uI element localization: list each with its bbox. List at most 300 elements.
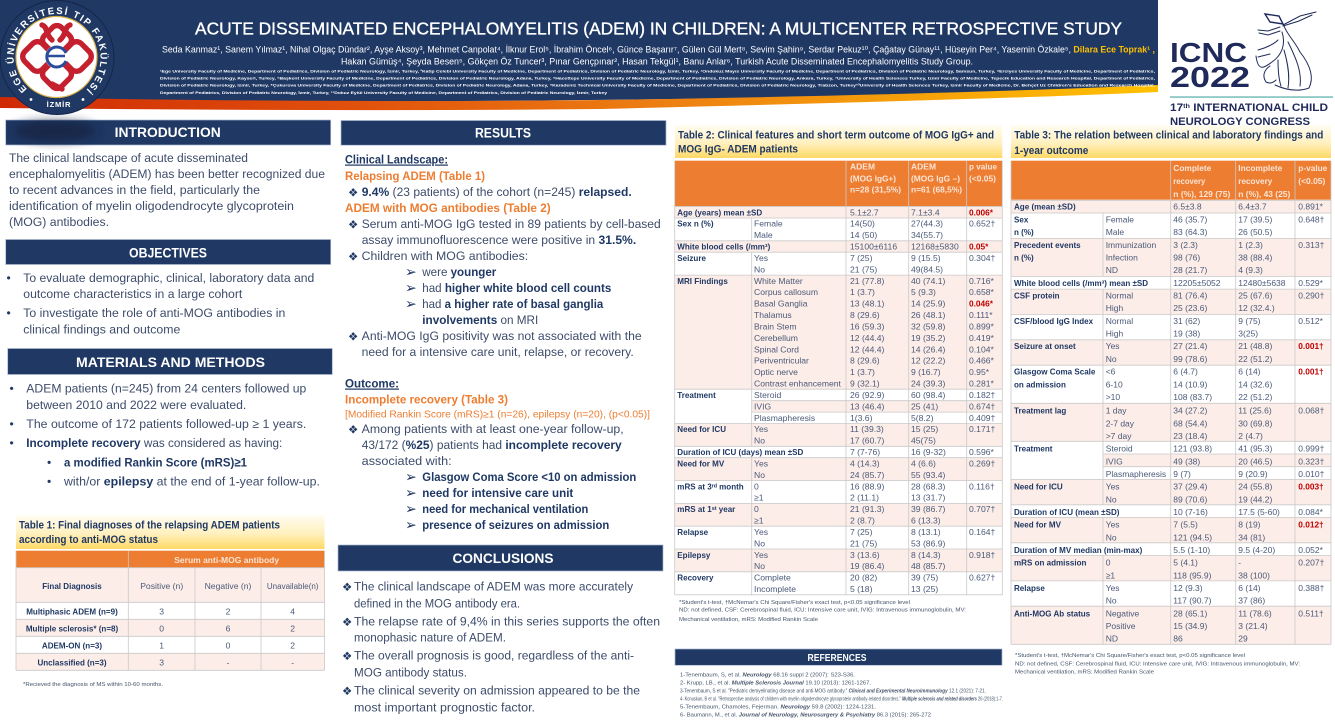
table 2 rows: Epilepsy: [677, 551, 711, 560]
logo: ICNC 2022: 2022: [1170, 62, 1250, 94]
table 2 rows: 8 (13.1): [911, 527, 941, 537]
table 2 rows: Corpus callosum: [754, 287, 818, 297]
text block: conclusions: ❖: [342, 684, 352, 698]
table 2 rows: mRS at 3ʳᵈ month: [677, 482, 744, 491]
text block: clinical landscape: ❖: [348, 250, 358, 264]
table 2 rows: 0.281*: [969, 378, 995, 388]
text block: introduction: (MOG) antibodies.: [9, 215, 109, 229]
header banner: [0, 0, 1158, 110]
table 3 header: n (%), 129 (75): [1173, 189, 1230, 199]
table 2 rows: White Matter: [754, 276, 803, 286]
table 3 rows: No: [1106, 596, 1117, 606]
table 3 rows: No: [1106, 532, 1117, 542]
table 3 footnotes: Mechanical ventilation, mRS: Modified Rankin Scale: [1015, 670, 1154, 676]
text block: conclusions: ❖: [342, 580, 352, 594]
table 1 grid: 2: [290, 640, 295, 650]
table 3 rows: 14 (32.6): [1238, 379, 1272, 389]
table 3 rows: 34 (27.2): [1173, 406, 1207, 416]
table 2 rows: Need for ICU: [677, 425, 726, 434]
table 3 rows: 0.001†: [1298, 367, 1324, 377]
table 2 rows: Steroid: [754, 390, 781, 400]
table 2 rows: ≥1: [754, 493, 764, 503]
text block: clinical landscape: were younger: [421, 265, 497, 279]
text block: conclusions: The relapse rate of 9,4% in this series supports the often: [354, 614, 660, 628]
table 3 rows: 0.511†: [1298, 608, 1324, 618]
logo: ICNC 2022: NEUROLOGY CONGRESS: [1170, 116, 1310, 128]
table 2 rows: Yes: [754, 527, 768, 537]
text block: clinical landscape: Serum anti-MOG IgG tested in 89 patients by cell-based: [362, 217, 661, 231]
table 3 rows: 14 (10.9): [1173, 379, 1207, 389]
text block: clinical landscape: ❖: [348, 186, 358, 200]
table 3 rows: 28 (65.1): [1173, 608, 1207, 618]
table 3 rows: 0.001†: [1298, 341, 1324, 351]
table 3 rows: 29: [1238, 634, 1248, 644]
table 2 rows: 9 (15.5): [911, 253, 941, 263]
heading: table 3 title: [1011, 125, 1331, 158]
table 3 rows: 26 (50.5): [1238, 227, 1272, 237]
table 1 grid: 2: [290, 623, 295, 633]
table 1 grid: 4: [290, 607, 295, 617]
affiliations: Department of Pediatrics, Division of Pediatric Neurology, İzmir, Turkey, ¹¹Dokuz Eylül University Faculty of Medicine, Department of Pediatrics, Division of Pediatric Neurology, İzmir, Turkey: [160, 90, 608, 95]
text block: objectives: outcome characteristics in a large cohort: [23, 287, 243, 301]
table 3 rows: [1014, 202, 1325, 644]
table 2 rows: 40 (74.1): [911, 276, 946, 286]
text block: objectives: •: [6, 271, 11, 285]
table 3 rows: 17 (39.5): [1238, 214, 1272, 224]
text block: methods: a modified Rankin Score (mRS)≥1: [64, 456, 247, 470]
table 2 rows: 39 (75): [911, 573, 938, 583]
text block: outcome: ❖: [348, 422, 358, 436]
text block: methods: •: [10, 417, 14, 431]
table 2 rows: Plasmapheresis: [754, 413, 815, 423]
table 3 rows: 46 (35.7): [1173, 214, 1207, 224]
table 2 rows: 13 (25): [911, 584, 938, 594]
table 2 rows: 15100±6116: [850, 242, 897, 252]
table 2 rows: 2 (8.7): [850, 516, 875, 526]
table 3 rows: Immunization: [1106, 240, 1157, 250]
panel: table 3: [1011, 125, 1331, 676]
table 2 rows: 55 (93.4): [911, 470, 946, 480]
table 1 grid: -: [227, 657, 230, 667]
table 3 rows: 3 (21.4): [1238, 621, 1268, 631]
text block: references: 3-Tenembaum, S et al. "Pediatric demyelinating disease and anti-MOG antibody." Clinical and Experimental Neuroimmunology 12.1 (2021): 7-21.: [680, 689, 986, 695]
table 3 header: Complete: [1173, 163, 1212, 173]
table 2 rows: 0.95*: [969, 367, 990, 377]
table 3 rows: 20 (46.5): [1238, 456, 1272, 466]
table 2 rows: 0.006*: [969, 207, 994, 217]
table 3 rows: 15 (34.9): [1173, 621, 1207, 631]
table 2 rows: 0: [754, 504, 759, 514]
table 2 rows: 0.716*: [969, 276, 995, 286]
affiliations: [160, 68, 1155, 95]
table 2 rows: 21 (91.3): [850, 504, 885, 514]
table 2 rows: Duration of ICU (days) mean ±SD: [677, 448, 804, 457]
table 3 rows: Male: [1106, 227, 1124, 237]
table 2 rows: Treatment: [677, 391, 716, 400]
table 3 rows: n (%): [1014, 253, 1034, 262]
table 3 rows: 81 (76.4): [1173, 290, 1207, 300]
table 2 rows: 49(84.5): [911, 264, 943, 274]
table 2 rows: 32 (59.8): [911, 321, 946, 331]
table 3 header: recovery: [1238, 176, 1273, 186]
table 2 rows: No: [754, 538, 765, 548]
heading: introduction: [6, 120, 331, 145]
table 3 rows: 0.891*: [1298, 202, 1324, 212]
table 2 rows: Complete: [754, 573, 791, 583]
table 2 rows: Cerebellum: [754, 333, 798, 343]
table 2 rows: 12168±5830: [911, 242, 959, 252]
text block: clinical landscape: ➢: [405, 264, 417, 280]
table 2 rows: 39 (86.7): [911, 504, 946, 514]
table 3 rows: 6 (14): [1238, 367, 1261, 377]
table 2 rows: [677, 207, 996, 594]
table 2 rows: 0.304†: [969, 253, 996, 263]
text block: introduction: The clinical landscape of acute disseminated: [9, 151, 248, 165]
table 3 rows: 0.529*: [1298, 278, 1324, 288]
text block: conclusions: The overall prognosis is good, regardless of the anti-: [354, 648, 634, 662]
table 1 grid: Final Diagnosis: [42, 582, 102, 591]
table 3 rows: Need for ICU: [1014, 483, 1063, 492]
table 2 rows: 0.674†: [969, 401, 996, 411]
table 1 grid: Positive (n): [140, 581, 183, 591]
table 3 rows: Glasgow Coma Scale: [1014, 368, 1096, 377]
text block: conclusions: monophasic nature of ADEM.: [354, 630, 506, 644]
table 3 rows: 28 (21.7): [1173, 265, 1207, 275]
heading: materials and methods: MATERIALS AND METHODS: [76, 354, 265, 370]
table 2 rows: Optic nerve: [754, 367, 798, 377]
table 3 rows: 0.648†: [1298, 214, 1325, 224]
table 2 rows: Contrast enhancement: [754, 378, 842, 388]
text block: outcome: Outcome:: [345, 376, 399, 390]
affiliations: Division of Pediatric Neurology, Izmir, Turkey, ⁸Çukurova University Faculty of Medicine, Department of Pediatrics, Division of Pediatric Neurology, Adana, Turkey, ⁹Karadeniz Technical University Faculty of Medicine, Department of Pediatrics, Division of Pediatric Neurology, Trabzon, Turkey¹⁰University of Health Sciences Turkey, Izmir Faculty of Medicine, Dr. Behçet Uz Children's Education and Research Hospital,: [160, 83, 1155, 88]
table 2 rows: 0.171†: [969, 424, 996, 434]
table 3 rows: 6 (4.7): [1173, 367, 1198, 377]
table 2 rows: 14 (50): [850, 230, 877, 240]
table 3 rows: 98 (76): [1173, 252, 1200, 262]
table 2 rows: 14 (25.9): [911, 299, 946, 309]
table 2 rows: 60 (98.4): [911, 390, 946, 400]
table 3 rows: ≥1: [1106, 570, 1115, 580]
table 1 grid: -: [291, 657, 294, 667]
text block: outcome: ➢: [405, 470, 417, 486]
text block: outcome: 43/172 (%25) patients had incomplete recovery: [362, 438, 622, 452]
table 3 rows: 31 (62): [1173, 316, 1200, 326]
table 3 rows: 12480±5638: [1238, 278, 1286, 288]
text block: clinical landscape: ➢: [405, 280, 417, 296]
table 3 header: recovery: [1173, 176, 1206, 186]
table 2 rows: MRI Findings: [677, 277, 728, 286]
table 1 grid: [16, 551, 324, 670]
text block: objectives: clinical findings and outcome: [23, 322, 181, 336]
text block: references: 5-Tenembaum, Chamoles, Fejerman. Neurology 59.8 (2002): 1224-1231.: [680, 705, 876, 711]
text block: methods: •: [10, 436, 14, 450]
table 3 rows: CSF protein: [1014, 292, 1060, 300]
table 2 rows: Female: [754, 219, 783, 229]
table 3 rows: 9 (75): [1238, 316, 1261, 326]
table 3 rows: 27 (21.4): [1173, 341, 1207, 351]
table 3 rows: 0.512*: [1298, 316, 1324, 326]
table 1 grid: 1: [159, 640, 164, 650]
table 2 grid: [675, 161, 1002, 595]
table 2 rows: 0.596*: [969, 447, 995, 457]
table 3 rows: 0.010†: [1298, 469, 1325, 479]
table 3 rows: High: [1106, 328, 1123, 338]
text block: references: 6- Baumann, M., et al. Journal of Neurology, Neurosurgery & Psychiatry 86.3 (2015): 265-272: [680, 713, 931, 719]
table 2 rows: Yes: [754, 458, 768, 468]
text block: outcome: need for mechanical ventilation: [422, 502, 588, 516]
table 2 rows: 13 (31.7): [911, 493, 946, 503]
table 2 rows: 19 (35.2): [911, 333, 946, 343]
table 2 rows: Age (years) mean ±SD: [677, 208, 762, 217]
table 2 rows: 27(44.3): [911, 219, 943, 229]
table 3 rows: White blood cells (/mm³) mean ±SD: [1014, 279, 1148, 288]
table 3 rows: 83 (64.3): [1173, 227, 1207, 237]
table 2 header: n=61 (68,5%): [911, 185, 962, 195]
table 3 rows: Steroid: [1106, 444, 1133, 454]
text block: outcome: ➢: [405, 502, 417, 518]
table 3 rows: Sex: [1014, 215, 1029, 224]
table 3 rows: 38 (100): [1238, 570, 1270, 580]
icon: Ege University Medical Faculty seal: İZMİR: [47, 100, 71, 109]
table 3 rows: Negative: [1106, 608, 1140, 618]
table 2 rows: 0.419*: [969, 333, 995, 343]
table 3 rows: 3(25): [1238, 328, 1258, 338]
table 3 rows: High: [1106, 303, 1123, 313]
heading: table 1 title: Table 1: Final diagnoses of the relapsing ADEM patients: [19, 520, 280, 532]
text block: methods: Incomplete recovery was considered as having:: [26, 436, 282, 450]
table 2 rows: 0.182†: [969, 390, 996, 400]
table 2 rows: 4 (14.3): [850, 458, 880, 468]
table 2 rows: 12 (44.4): [850, 344, 885, 354]
text block: introduction: to recent advances in the field, particularly the: [9, 183, 260, 197]
text block: clinical landscape: need for a intensive care unit, relapse, or recovery.: [362, 345, 634, 359]
table 2 footnotes: Mechanical ventilation, mRS: Modified Rankin Scale: [679, 617, 818, 623]
table 3 rows: on admission: [1014, 380, 1066, 389]
table 3 rows: Normal: [1106, 316, 1133, 326]
table 3 rows: 34 (81): [1238, 532, 1265, 542]
table 3 rows: 0.999†: [1298, 444, 1325, 454]
table 2 rows: 20 (82): [850, 573, 877, 583]
table 3 header: n (%), 43 (25): [1238, 189, 1290, 199]
table 3 rows: 22 (51.2): [1238, 354, 1272, 364]
text block: references: [680, 673, 1003, 719]
table 2 rows: 53 (86.9): [911, 538, 946, 548]
text block: outcome: [Modified Rankin Score (mRS)≥1 (n=26), epilepsy (n=20), (p<0.05)]: [345, 410, 650, 420]
authors: Seda Kanmaz¹, Sanem Yılmaz¹, Nihal Olgaç Dündar², Ayşe Aksoy³, Mehmet Canpolat⁴, İlknur Erol⁵, İbrahim Öncel⁶, Günce Başarır⁷, Gülen Gül Mert⁸, Sevim Şahin⁹, Serdar Pekuz¹⁰, Çağatay Günay¹¹, Hüseyin Per⁴, Yasemin Özkale⁵, Dilara Ece Toprak¹ ,: [162, 44, 1155, 54]
table 3 rows: 17.5 (5-60): [1238, 507, 1280, 517]
table 2 rows: 9 (32.1): [850, 378, 880, 388]
table 3 rows: 0.084*: [1298, 507, 1324, 517]
table 3 header: [1173, 163, 1328, 199]
text block: clinical landscape: ADEM with MOG antibodies (Table 2): [345, 201, 551, 215]
text block: outcome: associated with:: [362, 454, 452, 468]
table 3 rows: 12205±5052: [1173, 278, 1221, 288]
table 3 rows: Duration of MV median (min-max): [1014, 546, 1143, 555]
table 2 footnotes: ND: not defined, CSF: Cerebrospinal fluid, ICU: Intensive care unit, IVIG: Intravenous immunoglobulin, MV:: [679, 608, 966, 614]
text block: clinical landscape: ❖: [348, 330, 358, 344]
table 2 rows: Spinal Cord: [754, 344, 799, 354]
table 2 rows: 5 (18): [850, 584, 873, 594]
table 3 rows: Infection: [1106, 252, 1138, 262]
table 3 rows: 37 (86): [1238, 596, 1265, 606]
table 3 rows: 0.068†: [1298, 406, 1325, 416]
table 2 rows: 1(3.6): [850, 413, 873, 423]
table 3 rows: 0.003†: [1298, 482, 1324, 492]
table 2 rows: Yes: [754, 253, 768, 263]
table 1 grid: Serum anti-MOG antibody: [174, 555, 279, 565]
table 3 rows: Anti-MOG Ab status: [1014, 609, 1091, 618]
panel: references: [675, 649, 1003, 719]
heading: table 2 title: Table 2: Clinical features and short term outcome of MOG IgG+ and: [678, 129, 994, 141]
table 3 rows: 6 (14): [1238, 583, 1261, 593]
table 3 rows: Duration of ICU (mean ±SD): [1014, 508, 1120, 517]
table 2 rows: 34(55.7): [911, 230, 943, 240]
table 2 rows: White blood cells (/mm³): [677, 242, 771, 252]
table 2 rows: 26 (48.1): [911, 310, 946, 320]
heading: table 2 title: [675, 125, 1002, 158]
title: ACUTE DISSEMINATED ENCEPHALOMYELITIS (ADEM) IN CHILDREN: A MULTICENTER RETROSPECTIVE STUDY: [195, 18, 1122, 38]
panel: introduction: [6, 120, 331, 229]
table 3 rows: 19 (38): [1173, 328, 1200, 338]
table 3 rows: Treatment lag: [1014, 407, 1066, 416]
table 2 rows: 11 (39.3): [850, 424, 884, 434]
table 2 rows: Sex n (%): [677, 220, 714, 229]
text block: methods: ADEM patients (n=245) from 24 centers followed up: [26, 382, 307, 396]
table 2 rows: 19 (86.4): [850, 561, 885, 571]
table 3 grid: [1011, 161, 1331, 644]
table 2 rows: Yes: [754, 424, 768, 434]
table 3 rows: 6.5±3.8: [1173, 202, 1202, 212]
text block: methods: The outcome of 172 patients followed-up ≥ 1 years.: [26, 417, 306, 431]
table 3 rows: 6.4±3.7: [1238, 202, 1267, 212]
table 3 rows: 0.290†: [1298, 290, 1325, 300]
table 3 rows: 99 (78.6): [1173, 354, 1207, 364]
table 2 rows: 12 (22.2): [911, 356, 946, 366]
table 2 rows: 14 (26.4): [911, 344, 946, 354]
table 3 rows: 2 (4.7): [1238, 431, 1263, 441]
table 1 grid: Unavailable(n): [267, 582, 319, 591]
table 2 rows: 0.409†: [969, 413, 996, 423]
text block: conclusions: The clinical landscape of ADEM was more accurately: [354, 580, 634, 594]
text block: outcome: need for intensive care unit: [422, 486, 573, 500]
table 2 footnotes: [679, 600, 966, 623]
table 3 rows: 8 (19): [1238, 520, 1261, 530]
table 2 header: (MOG IgG+): [850, 173, 896, 183]
table 3 rows: mRS on admission: [1014, 559, 1087, 568]
table 3 rows: 10 (7-16): [1173, 507, 1208, 517]
table 2 rows: 2 (11.1): [850, 493, 879, 503]
heading: references: REFERENCES: [808, 652, 866, 664]
table 2 header: ADEM: [850, 162, 875, 172]
table 3 rows: Seizure at onset: [1014, 342, 1076, 351]
text block: methods: between 2010 and 2022 were evaluated.: [26, 398, 246, 412]
table 2 rows: 3 (13.6): [850, 550, 880, 560]
table 2 rows: 0.627†: [969, 573, 996, 583]
table 3 rows: 121 (93.8): [1173, 444, 1212, 454]
text block: clinical landscape: Clinical Landscape:: [345, 152, 448, 166]
table 2 rows: 12 (44.4): [850, 333, 885, 343]
table 3 rows: 0.012†: [1298, 520, 1324, 530]
table 3 rows: 6-10: [1106, 379, 1123, 389]
panel: table 1: [16, 515, 324, 688]
text block: clinical landscape: Anti-MOG IgG positivity was not associated with the: [362, 329, 642, 343]
heading: table 3 title: 1-year outcome: [1014, 145, 1088, 157]
table 3 rows: Need for MV: [1014, 521, 1062, 530]
table 2 rows: 15 (25): [911, 424, 938, 434]
heading: objectives: OBJECTIVES: [129, 245, 207, 260]
table 3 footnotes: ND: not defined, CSF: Cerebrospinal fluid, ICU: Intensive care unit, IVIG: Intravenous immunoglobulin, MV:: [1015, 661, 1300, 667]
affiliations: Division of Pediatric Neurology, Kayseri, Turkey, ⁵Başkent University Faculty of Medicine, Department of Pediatrics, Division of Pediatric Neurology, Adana, Turkey, ⁶Hacettepe University Faculty of Medicine, Department of Pediatrics, Division of Pediatric Neurology, Ankara, Turkey, ⁷University of Health Sciences Turkey, Izmir Faculty of Medicine, Tepecik Education and Research Hospital, Department of Pediatrics,: [160, 76, 1155, 81]
table 3 rows: 12 (9.3): [1173, 583, 1203, 593]
logo: ICNC 2022: 17: [1170, 102, 1182, 114]
text block: methods: with/or epilepsy at the end of 1-year follow-up.: [63, 474, 320, 488]
heading: introduction: INTRODUCTION: [115, 125, 221, 140]
table 3 rows: >10: [1106, 392, 1120, 402]
text block: clinical landscape: assay immunofluorescence were positive in 31.5%.: [362, 233, 636, 247]
table 2 rows: Periventricular: [754, 356, 809, 366]
table 3 rows: <6: [1106, 367, 1116, 377]
table 2 rows: 7 (25): [850, 527, 873, 537]
heading: table 1 title: [16, 515, 324, 549]
text block: outcome: ➢: [405, 486, 417, 502]
text block: methods: •: [47, 456, 51, 470]
heading: materials and methods: [8, 348, 332, 374]
table 3 rows: 117 (90.7): [1173, 596, 1212, 606]
table 2 rows: 14(50): [850, 219, 875, 229]
heading: results: RESULTS: [475, 125, 531, 140]
table 3 rows: 0.052*: [1298, 545, 1324, 555]
table 3 rows: 108 (83.7): [1173, 392, 1212, 402]
table 3 rows: Age (mean ±SD): [1014, 203, 1076, 212]
text block: outcome: Among patients with at least one-year follow-up,: [362, 422, 624, 436]
table 2 rows: 8 (29.6): [850, 356, 880, 366]
table 2 rows: Incomplete: [754, 584, 796, 594]
table 2 rows: Male: [754, 230, 773, 240]
panel: table 2: [675, 125, 1002, 623]
table 2 rows: 45(75): [911, 436, 936, 446]
table 1 grid: 3: [159, 657, 164, 667]
table 3 footnotes: *Student's t-test, †McNemar's Chi Square/Fisher's exact test, p<0.05 significance level: [1015, 653, 1245, 659]
text block: objectives: To evaluate demographic, clinical, laboratory data and: [23, 271, 314, 285]
table 3 rows: Yes: [1106, 341, 1120, 351]
table 3 rows: 12 (32.4.): [1238, 303, 1275, 313]
table 3 rows: Yes: [1106, 520, 1120, 530]
table 3 rows: 2-7 day: [1106, 418, 1135, 428]
table 3 rows: No: [1106, 354, 1117, 364]
table 3 rows: 25 (23.6): [1173, 303, 1207, 313]
table 3 rows: Positive: [1106, 621, 1136, 631]
table 2 rows: 0.466*: [969, 356, 995, 366]
text block: clinical landscape: ❖: [348, 218, 358, 232]
text block: conclusions: defined in the MOG antibody era.: [354, 596, 520, 610]
table 2 rows: 16 (88.9): [850, 481, 885, 491]
table 2 rows: Brain Stem: [754, 321, 797, 331]
table 3 rows: 4 (9.3): [1238, 265, 1263, 275]
panel: results: [341, 120, 666, 534]
text block: clinical landscape: Children with MOG antibodies:: [362, 249, 528, 263]
text block: conclusions: ❖: [342, 649, 352, 663]
table 2 rows: IVIG: [754, 401, 772, 411]
text block: outcome: ➢: [405, 518, 417, 534]
table 3 rows: -: [1238, 558, 1241, 568]
table 1 grid: 0: [159, 623, 164, 633]
table 2 rows: 24 (85.7): [850, 470, 885, 480]
table 3 header: p-value: [1298, 163, 1328, 173]
text block: objectives: [6, 271, 314, 336]
table 2 rows: Seizure: [677, 254, 706, 263]
text block: objectives: •: [6, 306, 11, 320]
table 2 rows: 5.1±2.7: [850, 207, 879, 217]
